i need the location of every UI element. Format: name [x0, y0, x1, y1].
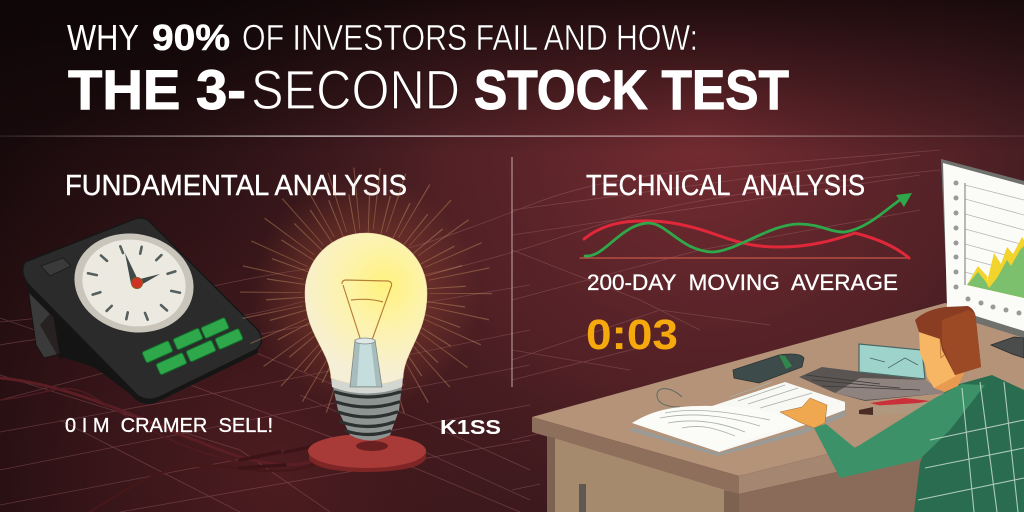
- laptop: [799, 344, 945, 401]
- hand: [780, 398, 827, 428]
- screw thread: [331, 377, 403, 440]
- heading: technical analysis: TECHNICAL ANALYSIS: [586, 170, 865, 202]
- shirt sleeve: [814, 384, 985, 478]
- bulb base disk: [308, 434, 426, 472]
- monitor stand: [991, 337, 1024, 358]
- monitor: [941, 159, 1024, 358]
- hair: [915, 306, 981, 375]
- title line 2: THE 3-: [68, 58, 246, 121]
- clock hands: [125, 253, 160, 288]
- vertical divider: [512, 157, 513, 387]
- plaid: [918, 382, 1024, 512]
- timer value: 0:03: [586, 311, 678, 359]
- glass: [305, 233, 427, 385]
- title line 2: STOCK TEST: [474, 58, 789, 121]
- monitor chart: [954, 180, 1024, 316]
- title line 1: 90%: [152, 17, 230, 58]
- desk: [532, 303, 1024, 512]
- light bulb: [305, 233, 427, 472]
- ear: [940, 339, 948, 358]
- inner stem: [350, 338, 382, 387]
- perspective floor grid: [0, 150, 940, 512]
- title line 2: [68, 58, 789, 121]
- horizontal divider: [0, 136, 1024, 137]
- filament: [342, 280, 392, 340]
- title line 1: OF INVESTORS FAIL AND HOW:: [242, 17, 698, 58]
- wire loop on desk: [657, 389, 682, 407]
- shirt torso: [914, 375, 1024, 512]
- clock vent: [41, 258, 71, 276]
- label: 200-day moving average: 200-DAY MOVING AVERAGE: [587, 270, 898, 295]
- heading: fundamental analysis: FUNDAMENTAL ANALYSIS: [65, 170, 407, 202]
- green keypad: [142, 317, 243, 375]
- title line 2: SECOND: [251, 58, 460, 121]
- title line 1: [67, 17, 698, 58]
- person: [780, 306, 1024, 512]
- title line 1: WHY: [67, 17, 139, 58]
- clock face: [65, 223, 203, 343]
- neck: [934, 360, 968, 392]
- caption: cramer sell: 0 I M CRAMER SELL!: [65, 415, 273, 437]
- caption: kiss: K1SS: [440, 417, 501, 439]
- light rays: [251, 178, 481, 408]
- stapler: [733, 354, 804, 383]
- moving average chart: [580, 193, 912, 258]
- power cord: [0, 378, 345, 512]
- open book: [630, 382, 846, 456]
- face: [919, 332, 956, 388]
- clock device: [23, 218, 262, 404]
- pen: [859, 398, 935, 416]
